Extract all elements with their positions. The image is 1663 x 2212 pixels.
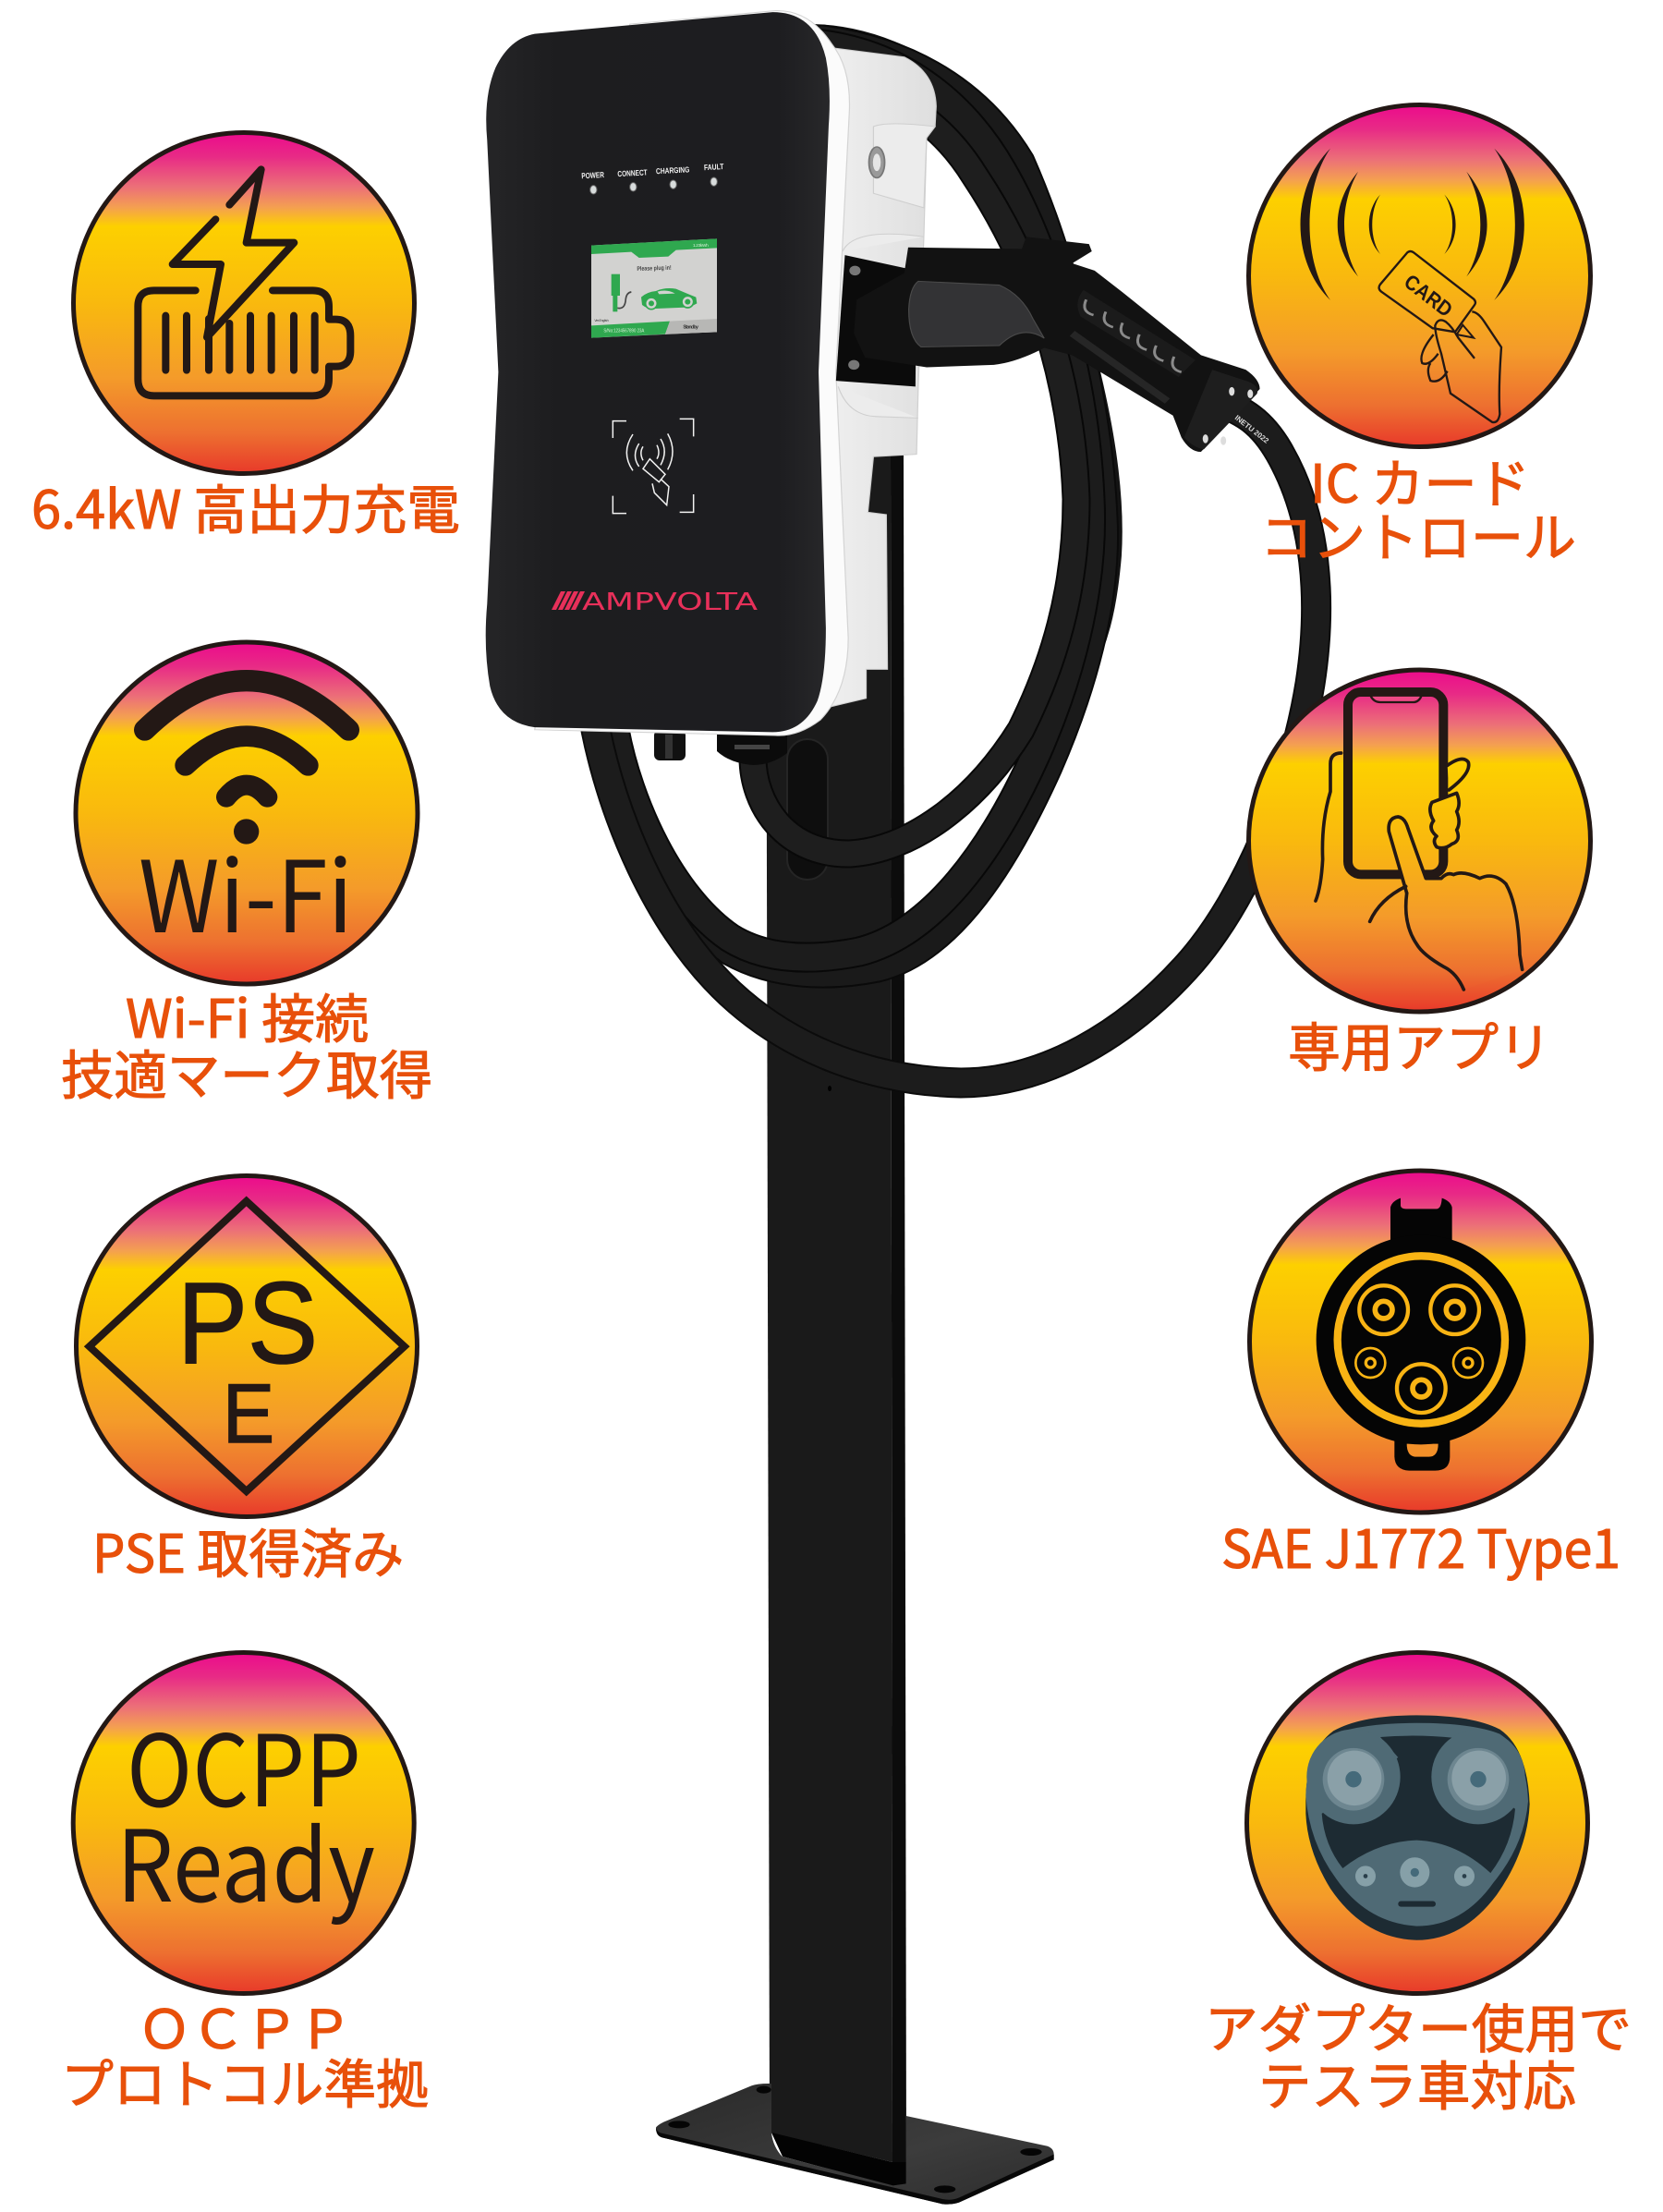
- feature: OCPP Ready: [73, 1652, 414, 1994]
- touch screen: Please plug in!: [637, 265, 672, 273]
- status indicators: CHARGING: [656, 164, 690, 176]
- icon: wifi arcs: [145, 681, 348, 845]
- status indicators: [581, 162, 724, 194]
- feature: SAE J1772 Type1: [1249, 1171, 1591, 1513]
- label: control: コントロール: [1260, 496, 1576, 572]
- feature: PSE: [76, 1175, 418, 1517]
- white side body: [798, 43, 936, 707]
- label: dedicated app: 専用アプリ: [1288, 1006, 1551, 1082]
- label: IC card: IC カード: [1310, 443, 1530, 518]
- label: 6.4kW: 6.4kW 高出力充電: [31, 468, 460, 544]
- feature: IC card control: [1249, 105, 1591, 447]
- RFID card reader mark: [613, 419, 694, 514]
- mounting post: [766, 453, 906, 2186]
- charging cable coils: [596, 39, 1317, 1083]
- status indicators: FAULT: [704, 162, 724, 172]
- touch screen: Standby: [683, 324, 698, 330]
- feature: Wi-Fi: Wi-Fi: [139, 818, 353, 961]
- feature: 6.4kW high power charging: [74, 133, 414, 473]
- label: PSE certified: PSE 取得済み: [92, 1513, 404, 1588]
- J1772 charging handle: [836, 237, 1260, 452]
- white bezel: [535, 10, 849, 735]
- icon: IC card with signal waves: CARD: [1400, 270, 1457, 322]
- label: Tesla compatible: テスラ車対応: [1258, 2045, 1576, 2121]
- base plate: [656, 2084, 1054, 2205]
- black front panel: [486, 12, 830, 732]
- label: protocol compliant: プロトコル準拠: [61, 2043, 429, 2119]
- touch screen: [591, 238, 717, 338]
- icon: OCPP Ready text: [116, 1692, 375, 1930]
- icon: OCPP Ready text: Ready: [116, 1787, 375, 1930]
- touch screen: S/No:1234567890 23A: [603, 328, 645, 334]
- icon: PSE diamond: E: [223, 1367, 274, 1461]
- cable print: INETU 2022: [1233, 413, 1270, 445]
- icon: J1772 connector: [1317, 1198, 1525, 1471]
- icon: OCPP Ready text: OCPP: [127, 1692, 361, 1835]
- icon: hand holding phone: [1316, 692, 1523, 990]
- cable holster bracket on post: [787, 739, 828, 880]
- charger head: [486, 10, 936, 735]
- icon: PSE diamond: PS: [177, 1259, 318, 1388]
- icon: battery with lightning bolt: [138, 169, 350, 395]
- label: with adapter: アダプター使用で: [1205, 1987, 1632, 2063]
- status indicators: CONNECT: [617, 167, 648, 178]
- status indicators: POWER: [581, 170, 605, 180]
- feature: Tesla adapter: [1247, 1652, 1587, 1994]
- AMPVOLTA logo: AMPVOLTA: [582, 589, 758, 616]
- icon: Tesla connector face: [1305, 1715, 1530, 1940]
- label: SAE J1772: SAE J1772 Type1: [1221, 1508, 1621, 1584]
- label: giteki mark: 技適マーク取得: [61, 1034, 432, 1110]
- feature: Wi-Fi: [76, 642, 418, 984]
- icon: PSE diamond: [90, 1201, 405, 1491]
- label: OCPP: ＯＣＰＰ: [138, 1987, 352, 2064]
- touch screen: Ver.English: [594, 319, 609, 322]
- label: Wi-Fi connection: Wi-Fi 接続: [126, 978, 369, 1053]
- feature: dedicated app: [1249, 670, 1591, 1012]
- AMPVOLTA logo: [552, 589, 758, 616]
- under-head knob and cable gland: [654, 730, 787, 765]
- touch screen: 1.23kWh: [693, 243, 709, 248]
- icon: IC card with signal waves: [1300, 149, 1524, 422]
